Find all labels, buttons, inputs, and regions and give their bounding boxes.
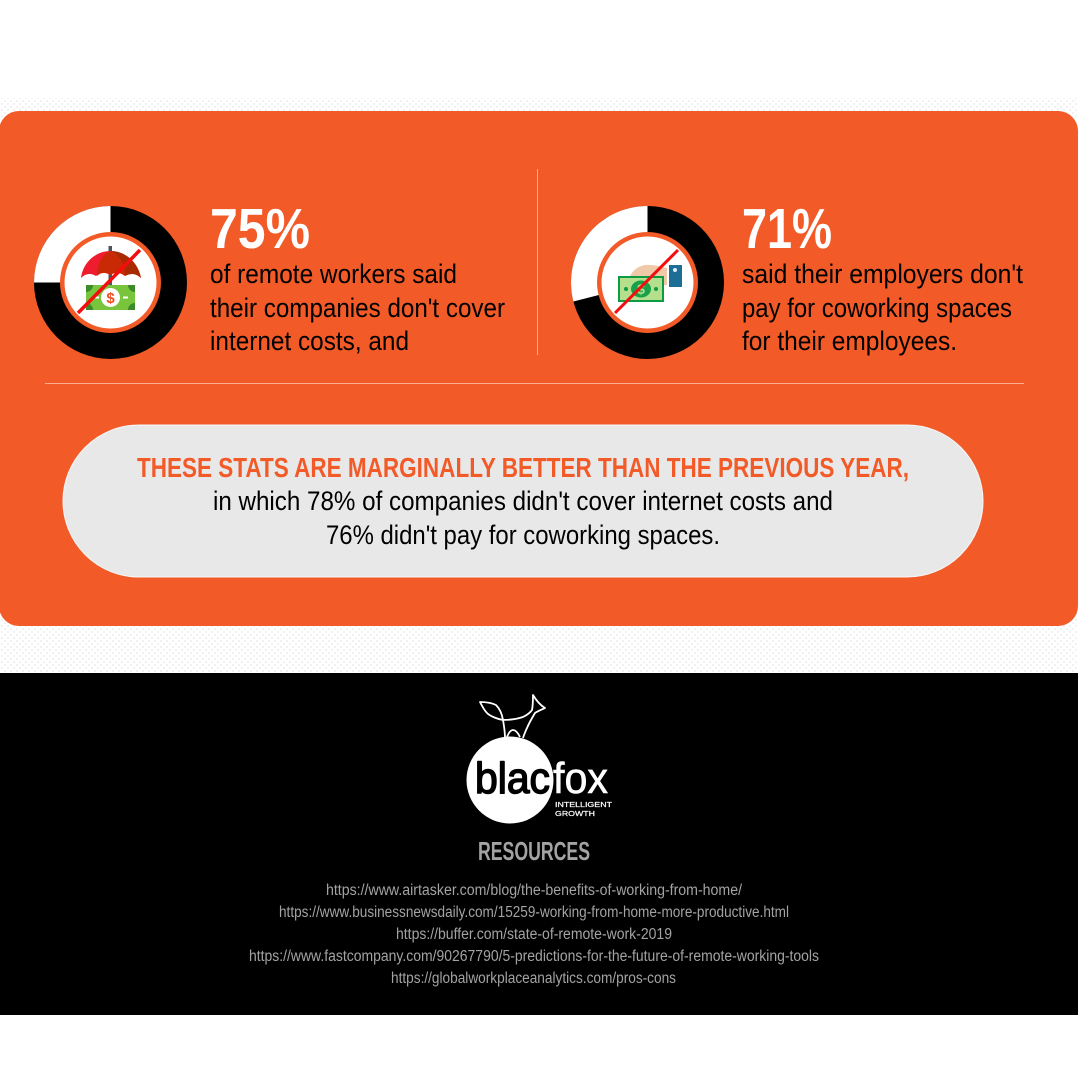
text: resource links: https://www.airtasker.com/blog/the-benefits-of-working-from-home/ xyxy=(326,882,743,899)
logo: blacfox: GROWTH xyxy=(555,811,595,818)
callout body xyxy=(213,486,833,550)
icon: umbrella over banknote, crossed out xyxy=(78,246,141,313)
text: resource links xyxy=(249,882,819,987)
panel: orange statistics card xyxy=(0,111,1078,626)
text: resource links: https://globalworkplaceanalytics.com/pros-cons xyxy=(391,970,676,987)
text: 75% description: internet costs, and xyxy=(210,326,409,356)
stat: 75%: 75% xyxy=(210,197,310,261)
icon: hand passing banknote, crossed out: $ xyxy=(637,281,645,297)
text: 75% description: of remote workers said xyxy=(210,259,457,289)
text: 75% description xyxy=(210,259,505,356)
logo: blacfox: INTELLIGENT xyxy=(555,802,613,809)
text: 75% description: their companies don't cover xyxy=(210,293,505,323)
callout body: 76% didn't pay for coworking spaces. xyxy=(326,520,720,550)
text: 71% description: said their employers don't xyxy=(742,259,1023,289)
text: 71% description xyxy=(742,259,1023,356)
heading: resources: RESOURCES xyxy=(478,836,590,866)
chart: 71% donut with icon xyxy=(571,206,724,359)
text: 71% description: pay for coworking spaces xyxy=(742,293,1012,323)
divider horizontal xyxy=(45,383,1024,384)
logo: blacfox: blac xyxy=(475,754,550,803)
divider vertical xyxy=(537,169,538,355)
text: resource links: https://www.businessnewsdaily.com/15259-working-from-home-more-productive.html xyxy=(279,904,789,921)
logo: blacfox xyxy=(466,695,613,824)
text: 71% description: for their employees. xyxy=(742,326,957,356)
icon: hand passing banknote, crossed out xyxy=(615,250,682,313)
panel: black footer xyxy=(0,673,1078,1015)
callout: previous year comparison xyxy=(63,425,983,577)
text: resource links: https://www.fastcompany.com/90267790/5-predictions-for-the-future-of-remote-working-tools xyxy=(249,948,819,965)
callout heading: THESE STATS ARE MARGINALLY BETTER THAN THE PREVIOUS YEAR, xyxy=(137,452,909,483)
text: resource links: https://buffer.com/state-of-remote-work-2019 xyxy=(396,926,672,943)
chart: 75% donut with icon xyxy=(34,206,187,359)
logo: blacfox: fox xyxy=(553,754,608,803)
callout body: in which 78% of companies didn't cover internet costs and xyxy=(213,486,833,516)
icon: umbrella over banknote, crossed out: $ xyxy=(106,290,115,307)
stat: 71%: 71% xyxy=(742,197,832,261)
